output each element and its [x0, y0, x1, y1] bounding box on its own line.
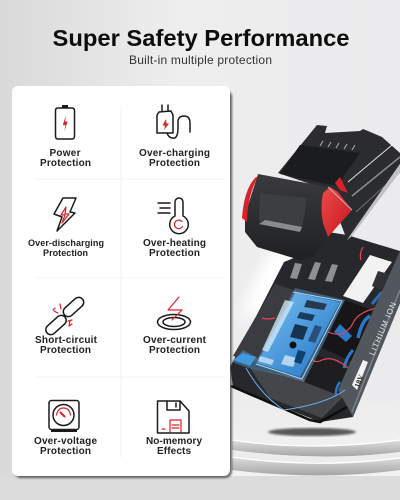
side label text: LITHIUM ION — [368, 301, 398, 357]
battery shadow — [268, 428, 356, 436]
battery head cap — [242, 174, 352, 260]
icon: lightning — [54, 198, 76, 231]
label: power protection: Power — [50, 148, 81, 159]
battery upper body rails — [278, 125, 400, 240]
icon: voltage gauge — [49, 400, 79, 432]
white label — [343, 255, 392, 303]
title: Super Safety Performance — [52, 25, 350, 51]
panel: protections: Protection — [149, 158, 200, 169]
panel: protections: Protection — [40, 158, 91, 169]
label: no-memory effects: No-memory — [146, 436, 202, 447]
panel: protections: Protection — [40, 345, 91, 356]
icon: floppy disk — [158, 401, 189, 433]
label: over-heating protection: Over-heating — [143, 238, 206, 249]
panel shadow — [14, 90, 232, 478]
panel: protections: Protection — [149, 248, 200, 259]
label: short-circuit protection: Short-circuit — [35, 335, 98, 346]
subtitle: Built-in multiple protection — [129, 53, 272, 67]
battery lower open housing: 18V — [352, 373, 366, 389]
pcb components — [258, 300, 327, 367]
icon: broken chain — [44, 295, 86, 337]
contacts — [290, 262, 338, 282]
red wires — [262, 247, 377, 368]
glow behind battery — [240, 236, 300, 320]
battery lower open housing — [230, 232, 400, 422]
panel: protections — [12, 86, 230, 476]
battery cells — [304, 292, 382, 396]
panel: protections: Protection — [43, 248, 88, 258]
icon: thermometer — [158, 198, 188, 234]
side panel with label — [338, 251, 400, 417]
icon: current target — [158, 297, 190, 330]
label: over-current protection: Over-current — [143, 335, 207, 346]
panel: protections: Protection — [149, 345, 200, 356]
panel: protections: Effects — [157, 446, 191, 457]
label: over-voltage protection: Over-voltage — [34, 436, 97, 447]
icon: charger — [157, 105, 190, 138]
label: over-charging protection: Over-charging — [139, 148, 210, 159]
label: over-discharging protection: Over-discharging — [28, 238, 104, 248]
panel: protections: Protection — [40, 446, 91, 457]
podium floor — [0, 395, 400, 500]
circuit board with blue glow — [232, 288, 345, 410]
icon: battery — [56, 105, 74, 139]
